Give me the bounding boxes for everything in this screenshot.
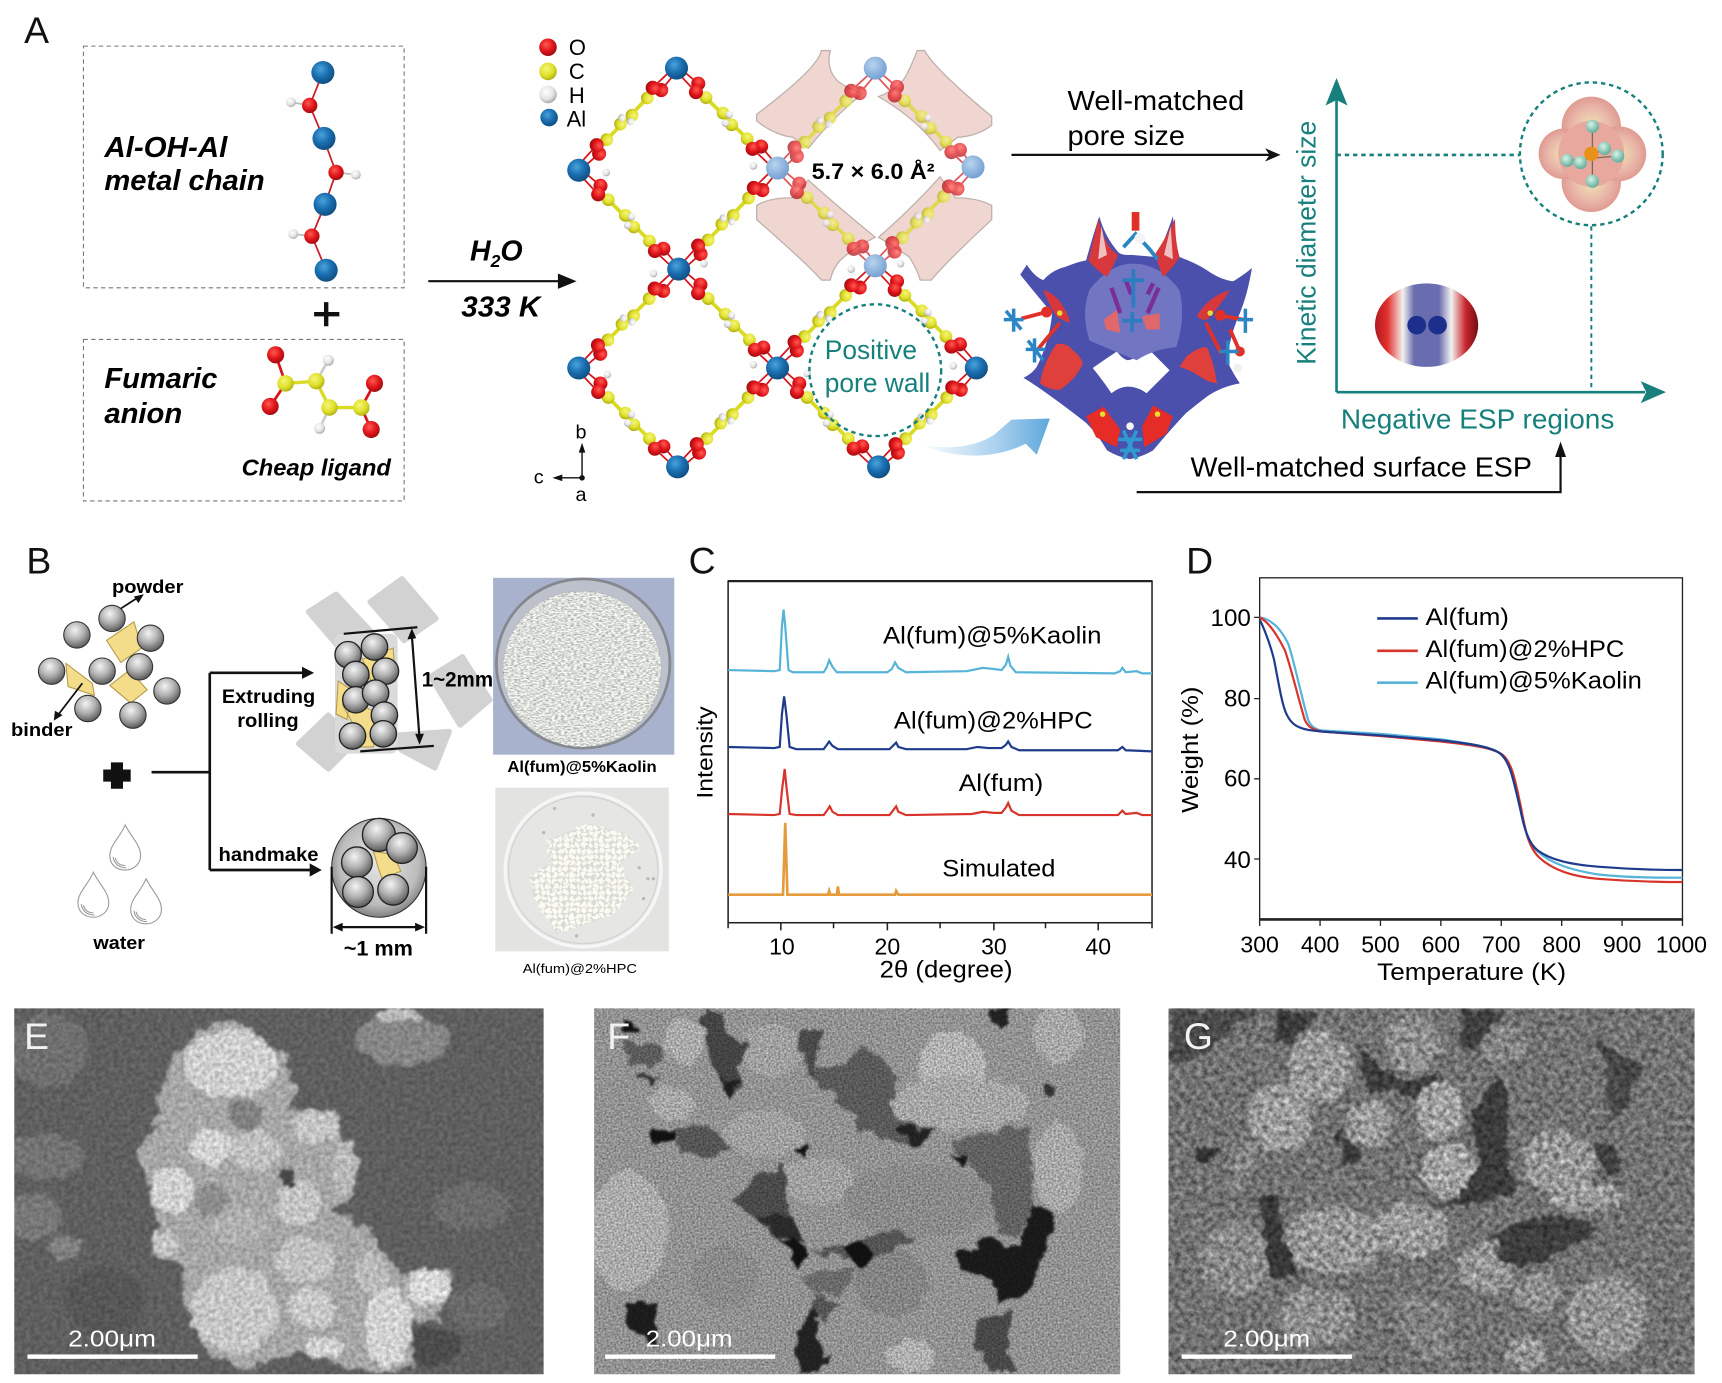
icon: metal chain molecule	[286, 61, 361, 282]
label: Simulated: Simulated	[942, 856, 1055, 883]
y axis title: Weight (%)	[1177, 687, 1203, 813]
schematic: handmade sphere	[332, 818, 426, 961]
crystal axes: b	[575, 421, 586, 443]
legend: atom types: Al	[567, 106, 586, 131]
trace: HPC	[728, 696, 1152, 751]
legend: atom types	[539, 35, 586, 131]
panel: Al-OH-Al metal chain	[83, 46, 404, 288]
panel: SEM image G	[1168, 1008, 1695, 1374]
water drops	[78, 825, 161, 953]
x tick labels: 40	[1085, 934, 1111, 960]
heading: metal chain: metal chain	[104, 165, 265, 197]
crystal axes	[534, 421, 586, 506]
panel label: F: F	[607, 1015, 630, 1057]
legend: Al(fum)	[1425, 604, 1509, 631]
scale bar F	[605, 1326, 775, 1359]
photo: Al(fum)@2%HPC beads	[495, 788, 669, 976]
curve: HPC	[1260, 617, 1682, 882]
text and arrow: well-matched pore size: pore size	[1067, 120, 1185, 151]
label: rolling: rolling	[237, 710, 299, 732]
y axis title: Intensity	[693, 706, 718, 799]
label: 1~2mm: 1~2mm	[422, 669, 493, 692]
plus sign	[314, 302, 339, 326]
arrow: H2O 333 K reaction: 333 K	[461, 291, 543, 323]
trace: simulated	[728, 823, 1152, 895]
ESP plot	[1292, 78, 1666, 434]
x tick labels	[1240, 931, 1707, 957]
icon: large molecule with ESP surface	[1520, 82, 1663, 225]
trace: Kaolin	[728, 610, 1152, 673]
arrow: H2O 333 K reaction: H	[470, 235, 491, 267]
scale bar G: 2.00μm	[1223, 1326, 1310, 1352]
panel: fumaric anion	[83, 339, 404, 501]
x tick labels: 20	[875, 934, 900, 960]
x tick labels: 600	[1422, 931, 1460, 957]
label: handmake: handmake	[219, 844, 318, 866]
caption: Al(fum)@5%Kaolin	[507, 759, 657, 776]
x tick labels: 500	[1361, 931, 1400, 957]
legend: Al(fum)@5%Kaolin	[1425, 668, 1642, 695]
caption: Cheap ligand: Cheap ligand	[242, 455, 392, 481]
label: ~1 mm: ~1 mm	[344, 938, 413, 961]
crystal framework	[567, 57, 988, 478]
plus icon	[103, 762, 131, 789]
heading: Fumaric: Fumaric	[104, 363, 218, 395]
heading: anion: anion	[104, 398, 182, 430]
x axis title: 2θ (degree)	[880, 957, 1013, 984]
panel label: G: G	[1184, 1015, 1213, 1057]
trace: Al(fum)	[728, 769, 1152, 815]
x axis title: Temperature (K)	[1377, 959, 1566, 986]
x tick labels	[769, 934, 1111, 960]
process arrows	[152, 667, 322, 877]
legend: atom types: H	[569, 83, 585, 108]
legend	[1377, 604, 1642, 695]
chart: TGA curves	[1177, 578, 1707, 986]
label: binder: binder	[11, 719, 72, 740]
scale bar F: 2.00μm	[646, 1326, 733, 1352]
caption: Al(fum)@2%HPC	[523, 961, 637, 976]
y tick labels: 100	[1211, 605, 1251, 632]
chart: XRD patterns	[693, 581, 1152, 984]
label: HPC: Al(fum)@2%HPC	[894, 707, 1093, 734]
legend: Al(fum)@2%HPC	[1425, 636, 1624, 663]
callout: positive pore wall: Positive	[825, 335, 917, 365]
icon: fumaric molecule	[262, 346, 383, 438]
axis label: negative ESP regions: Negative ESP regions	[1341, 403, 1614, 434]
curve: Al(fum)	[1260, 620, 1682, 870]
crystal axes: a	[575, 484, 586, 506]
y tick labels: 80	[1224, 685, 1251, 712]
curve: Kaolin	[1260, 617, 1682, 878]
legend: atom types: C	[569, 59, 585, 84]
y tick labels: 60	[1224, 766, 1251, 793]
panel label: A: A	[24, 9, 49, 51]
text and arrow: well-matched surface ESP	[1137, 442, 1566, 492]
legend: atom types: O	[569, 35, 586, 60]
panel label: E: E	[24, 1015, 49, 1057]
schematic: extruded pellets	[299, 579, 493, 769]
x tick labels: 700	[1482, 931, 1520, 957]
x tick labels: 10	[769, 934, 795, 960]
text and arrow: well-matched surface ESP: Well-matched surface ESP	[1190, 452, 1532, 483]
x tick labels: 800	[1542, 931, 1581, 957]
arrow: H2O 333 K reaction: 2	[490, 251, 501, 271]
scale bar G	[1182, 1326, 1352, 1359]
pore surface	[757, 51, 992, 280]
text and arrow: well-matched pore size: Well-matched	[1067, 85, 1244, 116]
scale bar E: 2.00μm	[68, 1326, 156, 1352]
heading: Al-OH-Al: Al-OH-Al	[103, 132, 228, 164]
y tick labels: 40	[1224, 847, 1251, 874]
label: pore size: 5.7 × 6.0 Å²	[812, 158, 935, 184]
label: Extruding: Extruding	[222, 686, 315, 708]
panel label: B: B	[26, 539, 51, 581]
text and arrow: well-matched pore size	[1011, 85, 1281, 161]
y tick labels	[1211, 605, 1251, 874]
label: Al(fum): Al(fum)	[959, 770, 1043, 797]
x tick labels: 1000	[1656, 931, 1707, 957]
x tick labels: 300	[1240, 931, 1279, 957]
panel label: D: D	[1186, 539, 1213, 581]
water drops: water	[92, 933, 145, 953]
photo: Al(fum)@5%Kaolin pellets	[493, 578, 674, 776]
label: Kaolin: Al(fum)@5%Kaolin	[883, 623, 1102, 650]
binder blocks	[66, 622, 147, 703]
ESP surface model	[1004, 212, 1253, 459]
x tick labels: 900	[1603, 931, 1641, 957]
panel: SEM image E	[14, 1008, 544, 1374]
crystal axes: c	[534, 466, 544, 488]
axis label: kinetic diameter size: Kinetic diameter size	[1292, 121, 1322, 365]
x tick labels: 400	[1301, 931, 1339, 957]
schematic: powder and binder	[11, 576, 183, 740]
callout: positive pore wall	[809, 304, 941, 436]
arrow: H2O 333 K reaction	[428, 235, 577, 323]
arrow: framework to ESP surface	[920, 419, 1050, 456]
panel label: C: C	[689, 539, 716, 581]
label: powder: powder	[112, 576, 183, 597]
callout: positive pore wall: pore wall	[825, 368, 930, 398]
icon: N2 molecule with ESP surface	[1375, 283, 1478, 367]
scale bar E	[27, 1326, 198, 1359]
panel: SEM image F	[594, 1008, 1120, 1374]
arrow: H2O 333 K reaction: O	[500, 235, 523, 267]
x tick labels: 30	[981, 934, 1007, 960]
